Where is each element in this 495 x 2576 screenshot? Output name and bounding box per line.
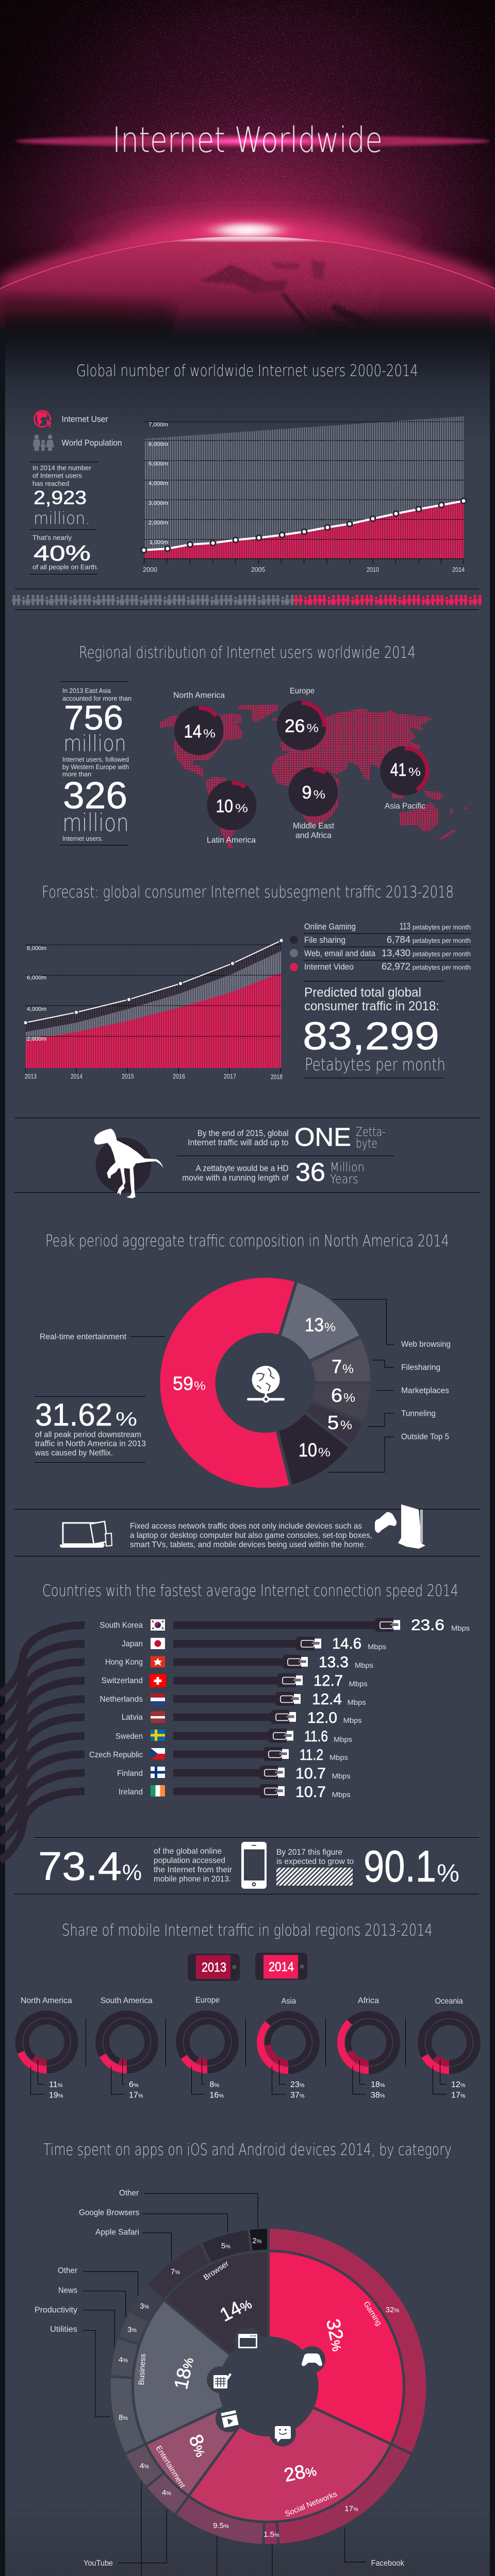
row: sweden: 11.6 [304,1728,328,1745]
donut: asia: 23% [290,2080,305,2089]
stat: 73.4 percent: 73.4 [38,1843,122,1889]
callout: predicted total traffic [303,981,446,1078]
stats block: east asia and western europe: million [62,809,129,837]
stats block: internet users count: In 2014 the number [32,464,92,472]
donut: oceania: 17% [451,2091,466,2099]
region: europe: % [307,721,319,735]
slice labels: Business [137,2353,147,2385]
row: finland: Mbps [332,1772,351,1780]
text: one zettabyte [188,1123,386,1151]
section: connection speed [0,1582,470,1860]
stats block: internet users count: 40% [34,541,91,565]
text: 36 million years: 36 [295,1158,325,1187]
area chart: users vs population: 2,000m [148,520,168,526]
region: latin america [207,781,256,845]
icon: dinosaur [94,1129,163,1198]
section: mobile traffic share [19,1921,477,2099]
area chart: subsegment traffic [24,939,284,1081]
donut labels: 5 [327,1412,339,1433]
icon hub: category icons [207,2327,325,2447]
stats block: east asia and western europe [60,681,131,845]
row: ireland: Mbps [332,1790,351,1799]
stat: 90.1 percent: % [437,1860,459,1887]
legend table: traffic by type: Internet Video [304,962,354,972]
legend: 2013 phone: 2013 [202,1960,226,1975]
callout lines and labels: Filesharing [401,1363,440,1372]
donut: north america: 11% [49,2080,63,2089]
callout lines and labels: Real-time entertainment [40,1333,127,1342]
text: fixed access note: smart TVs, tablets, and mobile devices being used within the home. [130,1540,366,1549]
slice labels: 8% [119,2413,128,2422]
area chart: subsegment traffic: 2017 [224,1073,236,1080]
stat: 73.4 percent: % [122,1860,142,1885]
text: fixed access note [130,1522,372,1549]
donut: south america: 17% [129,2091,143,2099]
stats block: east asia and western europe: more than [62,770,91,778]
donut: asia: Asia [282,1997,296,2006]
region: asia pacific: Asia Pacific [385,802,425,811]
decorative cables [0,1625,85,1860]
callout labels: YouTube [84,2559,113,2568]
callout labels: Apple Safari [95,2228,139,2237]
row: netherlands [100,1691,366,1708]
callout lines and labels: Tunneling [401,1410,436,1418]
area chart: users vs population: 3,000m [148,500,168,506]
donut: oceania: Oceania [435,1997,463,2006]
slice labels: 7% [171,2267,180,2276]
stats block: internet users count: 2,923 [34,487,87,509]
callout lines [83,2194,366,2576]
callout: netflix share [35,1396,146,1463]
donut chart: app categories [110,2228,416,2545]
slice labels: 14% [216,2292,255,2326]
donut: north america: 19% [49,2091,63,2099]
row: south korea: 23.6 [411,1617,444,1634]
donut labels: % [343,1391,355,1405]
legend label: internet user: Internet User [62,415,108,424]
donut: africa: 38% [371,2091,385,2099]
row: ireland: Ireland [119,1788,143,1797]
slice labels: 32% [322,2317,350,2353]
section: app time [35,2141,452,2576]
donut: asia [260,1997,316,2099]
row: hong kong: 13.3 [319,1654,349,1671]
region: north america: % [203,727,216,740]
area chart: users vs population: 6,000m [148,441,168,447]
donut: oceania: 12% [451,2080,466,2089]
donut labels: 13 [305,1314,324,1335]
text: one zettabyte: Zetta- [356,1125,386,1139]
slice labels: 2% [252,2236,262,2245]
stats block: internet users count: has reached [32,480,69,487]
region: asia pacific: 41 [390,760,406,780]
row: finland [117,1765,351,1782]
slice labels: 5% [221,2242,230,2250]
donut: south america: South America [101,1996,153,2005]
legend table: traffic by type: petabytes per month [412,963,471,971]
legend table: traffic by type [290,921,471,972]
area chart: users vs population: 2005 [251,566,265,573]
title: Internet Worldwide [112,120,383,161]
region: north america [173,691,225,755]
stats block: internet users count: of all people on Earth. [32,563,98,571]
area chart: subsegment traffic: 2015 [122,1073,134,1080]
legend table: traffic by type: 113 [400,921,410,931]
row: hong kong: Mbps [355,1661,373,1669]
row: czech republic: Czech Republic [89,1751,143,1759]
row: latvia: 12.0 [307,1709,337,1726]
donut chart: traffic composition [188,1279,373,1488]
callout labels: Utilities [50,2325,77,2334]
slice labels: 9.5% [213,2521,229,2530]
donut: south america [99,1996,155,2099]
text: one zettabyte: byte [356,1137,377,1151]
stats block: internet users count: of Internet users [32,472,82,480]
slice labels: 18% [170,2355,197,2391]
stat: 73.4 percent: of the global online [154,1847,222,1856]
row: switzerland [101,1672,368,1689]
row: ireland [119,1784,351,1801]
stats block: east asia and western europe: by Western Europe with [62,763,129,771]
row: south korea: Mbps [451,1624,470,1632]
region: middle east and africa: and Africa [295,831,332,840]
area chart: users vs population: 4,000m [148,481,168,487]
slice labels: 4% [140,2462,149,2470]
slice labels: 28% [282,2459,318,2486]
donut labels: % [318,1446,331,1460]
slice labels: 17% [344,2504,358,2513]
legend table: traffic by type: File sharing [304,936,345,945]
region: middle east and africa: % [314,788,325,801]
callout: predicted total traffic: Petabytes per month [305,1055,446,1075]
hero: starfield and glowing earth [0,0,495,335]
area chart: users vs population: 2000 [143,566,157,573]
area chart: subsegment traffic: 2013 [25,1073,37,1080]
text: 36 million years: Million [330,1160,365,1174]
slice labels [119,2236,399,2539]
text: fixed access note: a laptop or desktop computer but also game consoles, set-top boxes, [130,1531,372,1540]
region: asia pacific: % [408,765,421,778]
row: japan: Japan [122,1639,143,1649]
slice labels: 4% [119,2355,128,2364]
donut labels: % [194,1379,206,1393]
donut labels: 59 [173,1373,193,1394]
legend table: traffic by type: Web, email and data [304,949,376,958]
callout labels: Other [58,2266,77,2275]
row: sweden [116,1728,352,1745]
area chart: users vs population: 2014 [452,566,465,573]
area chart: subsegment traffic: 2014 [71,1073,82,1080]
donut: europe: Europe [195,1996,220,2005]
callout labels: Other [119,2189,139,2197]
legend table: traffic by type: 6,784 [387,935,410,945]
callout lines and labels: Marketplaces [401,1386,449,1395]
region: europe: Europe [290,687,315,696]
row: czech republic [89,1747,348,1764]
stats block: east asia and western europe: Internet users, followed [62,756,129,764]
donut: oceania [421,1997,477,2099]
row: netherlands: 12.4 [312,1691,342,1708]
donut: north america [19,1996,75,2099]
text: 36 million years: movie with a running length of [182,1174,289,1183]
stat: 73.4 percent: population accessed [154,1856,225,1865]
row: hong kong [105,1654,373,1671]
row: south korea: South Korea [100,1621,143,1630]
donut labels: 7 [332,1356,342,1377]
stats block: east asia and western europe: 326 [63,775,127,817]
region: middle east and africa: 9 [302,783,311,803]
row: japan [122,1635,386,1652]
callout: netflix share: % [116,1409,137,1430]
area chart: subsegment traffic: 6,000m [27,975,46,981]
row: finland: Finland [117,1769,143,1778]
callout: predicted total traffic: Predicted total global [304,985,421,999]
donut labels: % [342,1362,354,1376]
donut: south america: 6% [129,2080,139,2089]
legend table: traffic by type: 62,972 [382,961,410,972]
donut: africa: Africa [358,1996,379,2005]
donut: europe: 16% [209,2091,224,2099]
legend: 2014 phone: 2014 [269,1960,294,1974]
row: south korea [100,1617,470,1634]
donut: africa [341,1996,397,2099]
region: middle east and africa [288,767,338,840]
region: middle east and africa: Middle East [293,822,335,831]
stat: 73.4 percent: the Internet from their [154,1866,233,1874]
callout: predicted total traffic: 83,299 [303,1014,439,1058]
area chart: subsegment traffic: 8,000m [27,945,46,952]
slice labels: Browser [202,2259,230,2282]
row: czech republic: Mbps [329,1753,348,1761]
legend: 2013 phone [188,1954,240,1981]
callout labels [35,2189,404,2576]
row: sweden: Mbps [334,1735,352,1743]
callout lines and labels [40,1299,451,1472]
row: japan: 14.6 [332,1635,361,1652]
area chart: users vs population [140,416,467,573]
legend table: traffic by type: petabytes per month [412,950,471,958]
row: switzerland: Switzerland [101,1676,143,1685]
section: zettabyte callout [14,1118,480,1198]
text: one zettabyte: By the end of 2015, global [197,1129,289,1138]
section: mobile usage stats [14,1837,479,1894]
icon: laptop tablet phone [60,1521,112,1548]
stats block: internet users count: That's nearly [32,534,72,541]
area chart: users vs population: 5,000m [148,461,168,467]
callout: netflix share: was caused by Netflix. [35,1449,113,1458]
stat: 73.4 percent: mobile phone in 2013. [154,1875,231,1884]
section: forecast [24,883,471,1081]
row: switzerland: Mbps [349,1680,368,1688]
icon: network globe [247,1366,285,1402]
text: one zettabyte: ONE [294,1123,351,1151]
donut: europe [179,1996,235,2099]
slice labels: 3% [127,2326,137,2334]
separators [86,2018,405,2066]
area chart: users vs population: 1,000m [150,539,168,546]
text: 36 million years: A zettabyte would be a HD [196,1164,289,1173]
callout lines and labels: Web browsing [401,1340,451,1349]
donut: africa: 18% [371,2080,385,2089]
stats block: east asia and western europe: 756 [64,699,123,737]
legend label: world population: World Population [62,438,122,448]
donut labels: % [340,1418,352,1432]
text: 36 million years: Years [330,1172,358,1186]
region: europe: 26 [285,716,305,736]
section: global users [12,362,482,610]
region: latin america: % [235,802,248,815]
donut labels: 6 [331,1385,342,1406]
row: netherlands: Mbps [348,1698,366,1706]
slice labels: 3% [140,2302,149,2311]
donut: north america: North America [21,1996,72,2005]
donut labels [173,1314,355,1461]
stat: 90.1 percent [276,1842,459,1891]
slice labels: Social Networks [284,2489,338,2518]
row: ireland: 10.7 [295,1784,326,1801]
area chart: subsegment traffic: 2,000m [27,1036,46,1042]
donut: europe: 8% [209,2080,219,2089]
donut labels: % [324,1320,336,1334]
stats block: internet users count: million. [34,508,90,528]
region: asia pacific [380,746,430,811]
row: finland: 10.7 [295,1765,326,1782]
icon: smartphone [241,1842,267,1889]
section: regional distribution [60,643,467,849]
stat: 90.1 percent: 90.1 [364,1842,436,1891]
row: czech republic: 11.2 [300,1747,323,1764]
region: europe [277,687,326,750]
slice labels: 1.5% [263,2530,279,2539]
slice labels: 8% [185,2431,213,2460]
callout: netflix share: traffic in North America in 2013 [35,1439,146,1448]
slice labels: Entertainment [154,2444,187,2490]
row: japan: Mbps [368,1642,386,1651]
row: latvia [122,1709,362,1726]
region: north america: 14 [184,722,202,742]
area chart: subsegment traffic: 4,000m [27,1006,46,1012]
callout: predicted total traffic: consumer traffic in 2018: [304,999,439,1013]
section: peak traffic composition [35,1232,451,1488]
stat: 90.1 percent: is expected to grow to [276,1857,354,1866]
text: 36 million years [182,1158,365,1187]
stat: 73.4 percent [38,1843,233,1889]
legend icon: world population [33,435,54,451]
stat: 90.1 percent: By 2017 this figure [276,1848,342,1857]
callout labels: Google Browsers [79,2209,139,2217]
area chart: subsegment traffic: 2016 [173,1073,185,1080]
region: north america: North America [173,691,225,700]
callout lines and labels: Outside Top 5 [401,1433,449,1442]
row: latvia: Mbps [343,1716,362,1724]
stats block: east asia and western europe: Internet users. [62,835,103,842]
callout labels: Facebook [371,2559,404,2568]
legend table: traffic by type: petabytes per month [412,923,471,931]
stats block: east asia and western europe: In 2013 East Asia [62,687,111,694]
region: latin america: 10 [216,796,233,817]
area chart: users vs population: 7,000m [148,421,168,428]
earth globe [0,236,495,330]
row: switzerland: 12.7 [314,1672,343,1689]
slice labels: 4% [162,2488,171,2497]
slice labels: Gaming [361,2300,384,2328]
row: latvia: Latvia [122,1713,143,1722]
row: sweden: Sweden [116,1732,143,1741]
slice labels: 32% [386,2306,399,2314]
callout: netflix share: of all peak period downstream [35,1430,141,1439]
stats block: internet users count [30,462,98,574]
callout labels: Productivity [35,2306,77,2315]
area chart: subsegment traffic: 2018 [271,1074,283,1081]
donut: asia: 37% [290,2091,305,2099]
legend icon: internet user globe [34,411,53,428]
text: fixed access note: Fixed access network traffic does not only include devices such as [130,1522,362,1531]
area chart: users vs population: 2010 [367,566,379,573]
callout: netflix share: 31.62 [35,1397,112,1432]
text: one zettabyte: Internet traffic will add up to [188,1138,289,1147]
stats block: east asia and western europe: million [63,731,126,757]
dotted world map [160,704,467,849]
donut labels: 10 [299,1439,317,1461]
legend table: traffic by type: 13,430 [382,948,410,958]
row: netherlands: Netherlands [100,1695,143,1704]
legend table: traffic by type: Online Gaming [304,922,356,931]
section: fixed access devices [14,1504,480,1556]
row: hong kong: Hong Kong [105,1658,143,1667]
legend: 2014 phone [255,1953,307,1980]
people row: share of internet users [12,588,482,610]
legend table: traffic by type: petabytes per month [412,937,471,944]
callout labels: News [58,2286,77,2295]
icon: game console and controller [375,1504,425,1549]
stats block: east asia and western europe: accounted for more than [62,694,131,702]
region: latin america: Latin America [207,836,256,845]
